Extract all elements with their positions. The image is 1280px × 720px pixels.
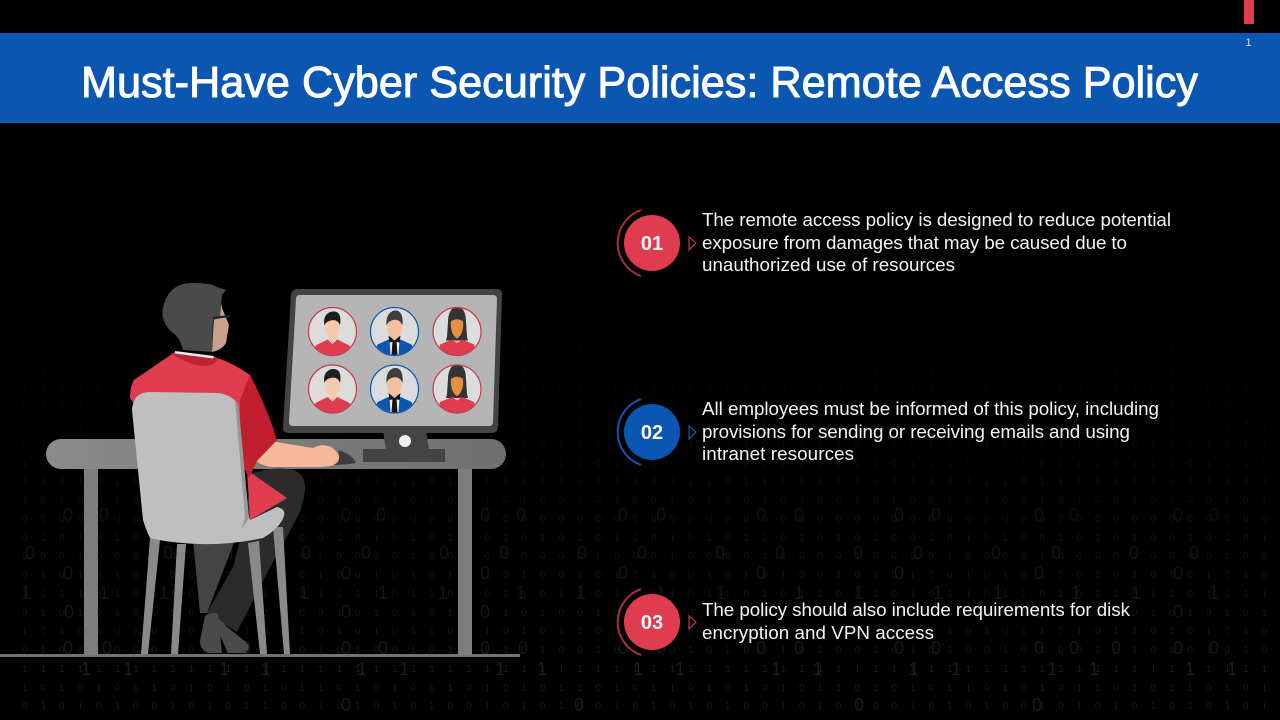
large binary digits: 000000000000000000	[63, 505, 1219, 525]
binary code pattern: 1 0 1 0 1 0 1 1 0 1 0 1 0 1 0 1 1 0 1 0 1 0 1 1 0 1 0 1 0 1 1 0 1 0 1 1 0 1 0 1 0 1 0 1 1 0 1 0 1 0 1 1 0 1 0 1 0 1 1 0 1 0 1 1 0 1 0 1	[22, 683, 1272, 694]
binary code pattern: 0 0 0 0 0 0 0 0 0 0 0 0 0 0 0 0 0 0 0 0 0 0 0 0 0 0 0 0 0 0 0 0 0 0 0 0 0 0 0 0 0 0 0 0 0 0 0 0 0 0 0 0 0 0 0 0 0 0 0 0 0 0 0 0 0 0 0 0	[22, 514, 1272, 525]
illustration: person at desk on video call	[0, 283, 520, 657]
arrow 02	[689, 426, 696, 439]
text 02	[702, 398, 1159, 464]
arrow 01	[689, 237, 696, 250]
page number: 1	[1245, 37, 1252, 49]
large binary digits: 00000000	[64, 602, 1183, 622]
binary code pattern: 1 0 1 0 1 0 1 0 1 0 1 0 1 0 1 1 0 1 0 1 0 1 1 0 1 1 0 1 0 1 1 0 1 0 1 1 0 1 0 1 1 0 1 0 1 1 0 1 0 1 1 0 1 0 1 1 0 1 0 1 1 0 1 0 1 0 1 0	[22, 626, 1272, 637]
item 02	[618, 398, 1159, 465]
text 01: unauthorized use of resources	[702, 254, 955, 275]
header band	[0, 33, 1280, 123]
text 03	[702, 599, 1131, 643]
text 03: The policy should also include requirements for disk	[702, 599, 1131, 620]
badge 03	[618, 589, 680, 655]
binary code pattern: 1 0 1 1 0 1 0 1 1 0 1 0 1 1 0 1 0 1 1 0 1 0 1 1 0 1 0 1 1 0 1 0 1 1 0 1 0 1 1 0 1 0 1 1 0 1 0 1 1 0 1 0 1 1 0 1 0 1 1 0 1 0 1 1 0 1 0 1	[22, 420, 1272, 431]
binary code pattern: 0 1 1 0 1 0 1 1 0 1 0 1 1 0 1 0 1 1 0 1 0 1 1 0 1 0 1 1 0 1 0 1 1 0 1 0 1 1 0 1 0 1 1 0 1 0 1 1 0 1 0 1 1 0 1 0 1 1 0 1 0 1 1 0 1 0 1 1	[22, 364, 1272, 375]
video call avatars	[308, 306, 481, 413]
binary code pattern	[22, 345, 1272, 712]
arrow 03	[689, 616, 696, 629]
large binary digits	[21, 505, 1237, 715]
text 01	[702, 209, 1171, 275]
binary code pattern: 0 1 0 1 0 1 0 1 0 0 1 0 1 0 1 0 1 0 0 1 0 1 0 1 0 1 0 1 0 0 1 0 1 0 1 0 0 1 0 1 0 1 0 0 1 0 1 0 1 0 0 1 0 1 0 1 0 0 1 0 1 0 1 0 1 0 1 0	[22, 570, 1272, 581]
binary code pattern: 0 1 0 1 0 1 0 0 1 0 1 0 1 1 0 0 1 0 1 0 1 0 1 0 0 1 0 1 0 1 0 0 1 0 1 0 1 0 1 0 0 1 0 1 0 1 0 0 1 0 1 0 1 0 0 1 0 1 0 1 0 1 0 1 0 1 0 1	[22, 701, 1272, 712]
large binary digits: 111111111111111111	[21, 583, 1219, 603]
binary code pattern: 1 0 1 1 0 1 0 1 1 0 1 1 0 1 0 1 1 0 1 1 0 1 1 0 1 0 1 1 0 1 1 0 1 0 1 1 0 1 1 0 1 0 1 1 0 1 1 0 1 0 1 1 0 1 1 0 1 0 1 1 0 1 1 0 1 0 1 1	[22, 589, 1272, 600]
large binary digits: 111111111111111111	[81, 659, 1237, 679]
binary code pattern: 0 0 0 1 0 0 0 1 0 0 0 1 0 0 0 0 1 0 0 0 0 1 0 0 0 0 1 0 0 0 0 1 0 0 0 1 0 0 0 0 1 0 0 0 0 1 0 0 0 0 1 0 0 0 0 1 0 0 0 0 1 0 0 0 0 1 0 0	[22, 551, 1272, 562]
text 01: exposure from damages that may be caused due to	[702, 232, 1127, 253]
text 02: All employees must be informed of this policy, including	[702, 398, 1159, 419]
binary code pattern: 1 0 1 0 0 1 0 1 0 0 1 0 1 0 0 1 0 1 0 0 1 0 1 0 0 1 0 1 0 0 1 0 1 0 0 1 0 1 0 0 1 0 1 0 0 1 0 1 0 0 1 0 1 0 0 1 0 1 0 0 1 0 1 0 0 1 0 1	[22, 345, 1272, 356]
binary code pattern: 0 1 0 1 1 0 1 0 1 1 0 1 0 1 1 0 1 0 1 1 0 1 0 1 1 0 1 0 1 1 0 1 0 1 1 0 1 0 1 1 0 1 0 1 1 0 1 0 1 1 0 1 0 1 1 0 1 0 1 1 0 1 0 1 1 0 1 0	[22, 401, 1272, 412]
title: Must-Have Cyber Security Policies: Remote Access Policy	[81, 58, 1198, 107]
floor line	[0, 654, 520, 657]
monitor	[283, 289, 502, 462]
large binary digits: 000000000	[63, 563, 1183, 583]
badge 01: 01	[641, 233, 663, 255]
text 03: encryption and VPN access	[702, 622, 934, 643]
binary code pattern: 0 1 0 1 0 1 0 0 1 0 1 0 1 0 1 0 0 1 0 1 0 1 0 1 0 0 1 0 1 0 0 1 0 1 0 1 0 0 1 0 1 0 1 0 0 1 0 1 0 1 0 1 0 0 1 0 1 0 1 0 0 1 0 1 0 1 0 1	[22, 608, 1272, 619]
badge 02: 02	[641, 422, 663, 444]
binary code pattern: 1 1 1 0 1 1 1 0 1 1 1 0 1 1 1 0 1 1 1 0 1 1 1 0 1 1 1 0 1 1 1 0 1 1 1 0 1 1 1 0 1 1 1 0 1 1 1 0 1 1 1 0 1 1 1 0 1 1 1 0 1 1 1 0 1 1 1 0	[22, 458, 1272, 469]
binary code pattern: 1 1 0 1 1 1 0 1 1 1 0 1 1 1 0 1 1 1 0 1 1 1 0 1 1 1 0 1 1 1 0 1 1 1 0 1 1 1 0 1 1 1 0 1 1 1 0 1 1 1 0 1 1 1 0 1 1 1 0 1 1 1 0 1 1 1 0 1	[22, 476, 1272, 487]
person seated from behind	[130, 283, 356, 653]
text 02: intranet resources	[702, 443, 854, 464]
text 01: The remote access policy is designed to reduce potential	[702, 209, 1171, 230]
binary code pattern: 0 1 0 0 1 0 0 0 1 0 1 0 0 1 0 0 1 0 1 0 0 1 0 1 0 0 1 0 1 0 0 1 0 1 0 0 1 0 1 0 0 1 0 1 0 0 1 0 1 0 1 0 0 1 0 1 0 0 1 0 1 0 1 0 1 0 1 0	[22, 645, 1272, 656]
badge 01	[618, 210, 680, 276]
large binary digits: 0000000000000000000	[63, 638, 1219, 658]
item 03	[618, 589, 1131, 655]
binary code pattern: 1 0 0 1 0 1 0 0 1 0 1 0 0 1 0 1 0 0 1 0 1 0 0 1 0 1 0 0 1 0 1 0 0 1 0 1 0 0 1 0 1 0 0 1 0 1 0 0 1 0 1 0 0 1 0 1 0 0 1 0 1 0 0 1 0 1 0 0	[22, 383, 1272, 394]
red corner tab	[1244, 0, 1254, 24]
desk	[46, 439, 506, 655]
binary code pattern: 1 1 1 1 1 1 1 1 1 1 1 1 1 1 1 1 1 1 1 1 1 1 1 1 1 1 1 1 1 1 1 1 1 1 1 1 1 1 1 1 1 1 1 1 1 1 1 1 1 1 1 1 1 1 1 1 1 1 1 1 1 1 1 1 1 1 1 1	[22, 664, 1272, 675]
large binary digits: 000000000000000000	[25, 543, 1199, 563]
chair	[132, 392, 290, 654]
binary code pattern: 0 1 1 0 1 0 1 1 0 1 0 1 1 0 1 0 1 1 0 1 0 1 1 0 1 0 1 1 0 1 0 1 1 0 1 0 1 1 0 1 0 1 1 0 1 0 1 1 0 1 0 1 1 0 1 0 1 1 0 1 0 1 1 0 1 0 1 1	[22, 439, 1272, 450]
large binary digits: 0000	[341, 695, 1042, 715]
item 01	[618, 209, 1171, 276]
text 02: provisions for sending or receiving emails and using	[702, 421, 1130, 442]
binary code pattern: 0 1 0 1 0 1 0 0 1 0 1 0 1 0 1 0 0 1 0 1 0 1 0 1 0 0 1 0 1 0 1 0 1 0 0 1 0 1 0 1 0 0 1 0 1 0 1 0 0 1 0 1 0 1 0 0 1 0 1 0 1 0 0 1 0 1 0 1	[22, 533, 1272, 544]
badge 03: 03	[641, 612, 663, 634]
badge 02	[618, 399, 680, 465]
binary code pattern: 1 0 1 0 0 1 0 1 0 0 1 0 1 0 0 1 0 1 0 0 1 0 1 0 0 1 0 1 0 0 1 0 1 0 0 1 0 1 0 0 1 0 1 0 0 1 0 1 0 0 1 0 1 0 0 1 0 1 0 0 1 0 1 0 0 1 0 1	[22, 495, 1272, 506]
